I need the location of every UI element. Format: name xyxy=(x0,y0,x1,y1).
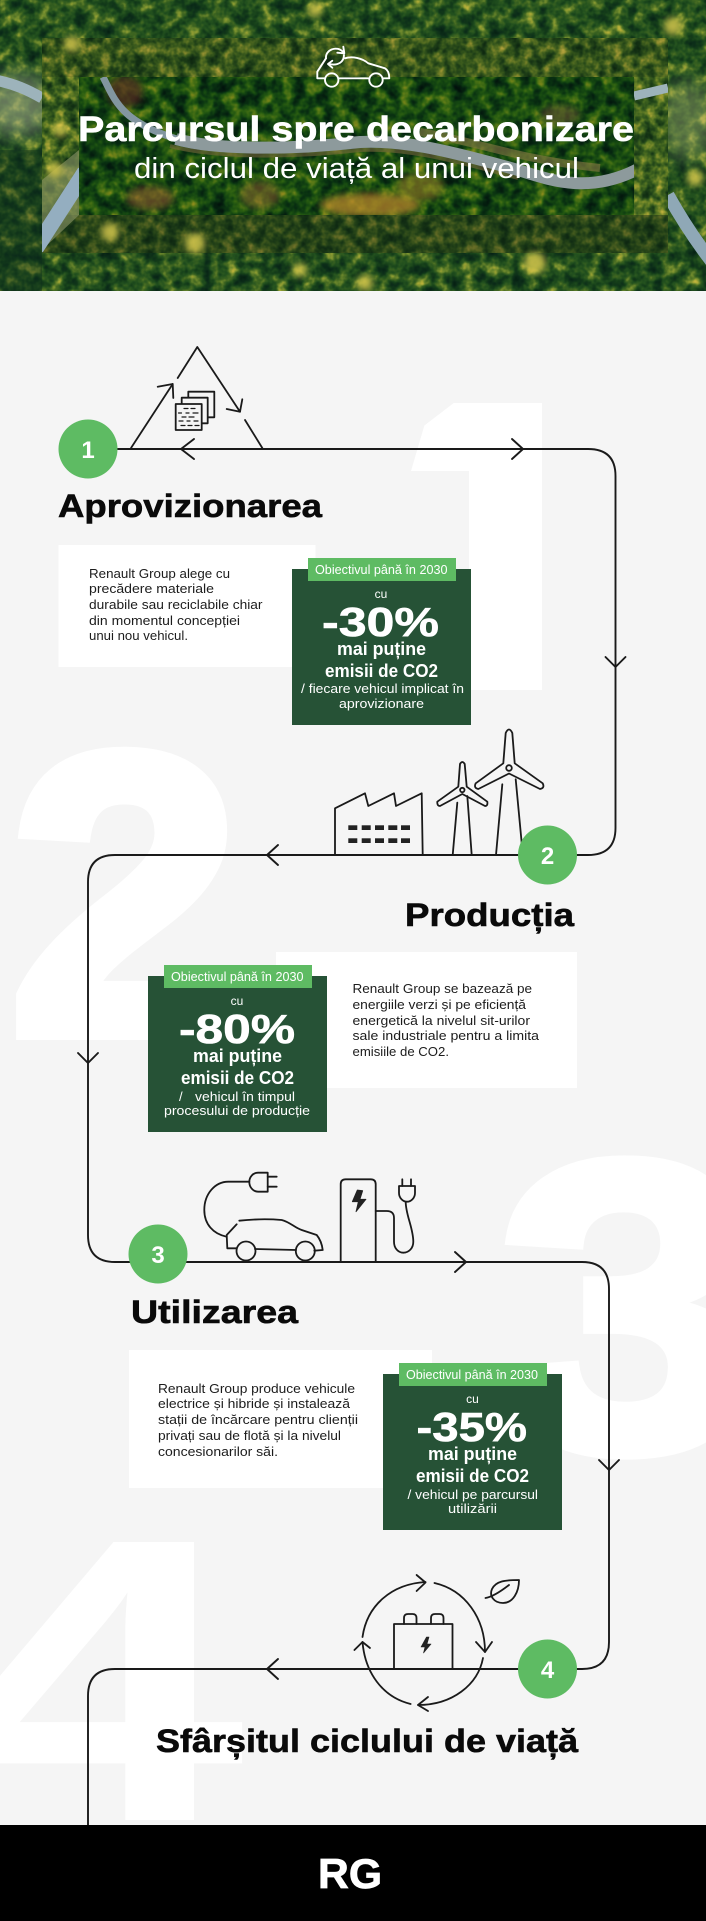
step 2 target card: emisii de CO2 xyxy=(181,1068,294,1088)
step 4 badge xyxy=(518,1640,577,1698)
step 2 description panel: Renault Group se bazează pe xyxy=(352,981,532,996)
step 4 badge: 4 xyxy=(541,1657,555,1684)
step 1 badge: 1 xyxy=(81,437,95,464)
step 3 target card: utilizării xyxy=(448,1501,497,1516)
step 1 description panel: unui nou vehicul. xyxy=(89,628,188,643)
step 1 description panel xyxy=(58,545,316,667)
step 2 target card: vehicul în timpul xyxy=(195,1089,295,1104)
hero title: Parcursul spre decarbonizare xyxy=(78,110,634,149)
icon: small wind turbine xyxy=(437,762,487,855)
step 3 description panel: privați sau de flotă și la nivelul xyxy=(158,1428,341,1443)
step 1 target card: -30% xyxy=(322,599,439,645)
step 3 target card: cu xyxy=(466,1392,479,1406)
step 1 description panel: din momentul concepției xyxy=(89,613,240,628)
logo: RG: RG xyxy=(318,1850,382,1897)
icon: leaf xyxy=(486,1580,519,1603)
step 1 description panel: Renault Group alege cu xyxy=(89,566,230,581)
big number 1: 1 xyxy=(404,324,594,776)
step 2 description panel: emisiile de CO2. xyxy=(352,1044,449,1059)
step 3 description panel: electrice și hibride și instalează xyxy=(158,1396,351,1411)
arrows on journey line xyxy=(78,439,626,1679)
step 2 description panel: energiile verzi și pe eficiență xyxy=(352,997,527,1012)
step 1 target card: cu xyxy=(375,587,387,601)
step 3 description panel: concesionarilor săi. xyxy=(158,1444,278,1459)
step 2 description panel: energetică la nivelul sit-urilor xyxy=(352,1013,531,1028)
step 1 target card: mai puține xyxy=(337,639,426,659)
step 3 target card: -35% xyxy=(416,1404,527,1450)
icon: battery in recycling loop xyxy=(354,1575,492,1711)
step 2 badge xyxy=(518,826,577,884)
hero icon: car with recycling arrows xyxy=(317,47,389,87)
step 3 target card: emisii de CO2 xyxy=(416,1466,529,1486)
step 1 target card xyxy=(292,558,471,725)
step 3 badge xyxy=(128,1224,188,1284)
step 2 badge: 2 xyxy=(541,843,554,870)
step 1 badge xyxy=(58,420,118,478)
step 3 description panel xyxy=(129,1350,432,1488)
step 1 target card: / fiecare vehicul implicat în xyxy=(301,681,464,696)
side road left xyxy=(0,80,42,98)
icon: large wind turbine xyxy=(475,730,543,855)
hero subtitle: din ciclul de viață al unui vehicul xyxy=(134,153,579,185)
step 3 target card xyxy=(383,1363,562,1530)
step 3 description panel: stații de încărcare pentru clienții xyxy=(158,1412,358,1427)
step 1 description panel: durabile sau reciclabile chiar xyxy=(89,597,263,612)
step 2 heading: Producția xyxy=(405,897,574,933)
step 3 target card: / vehicul pe parcursul xyxy=(408,1487,538,1502)
step 2 target card: Obiectivul până în 2030 xyxy=(171,970,304,984)
hero: aerial forest with road xyxy=(0,0,706,291)
step 1 description panel: precădere materiale xyxy=(89,581,214,596)
step 1 target card: emisii de CO2 xyxy=(325,661,438,681)
icon: charging station xyxy=(341,1179,415,1262)
icon: electric car with cable xyxy=(204,1173,323,1260)
journey line xyxy=(88,449,616,1825)
step 2 target card xyxy=(148,965,327,1132)
step 2 target card: mai puține xyxy=(193,1046,282,1066)
step 2 description panel xyxy=(276,952,577,1088)
step 3 description panel: Renault Group produce vehicule xyxy=(158,1381,355,1396)
step 2 target card: cu xyxy=(231,994,243,1008)
step 3 heading: Utilizarea xyxy=(131,1294,298,1330)
step 2 description panel: sale industriale pentru a limita xyxy=(352,1028,540,1043)
inner panel xyxy=(79,77,634,215)
step 2 target card: -80% xyxy=(179,1006,295,1052)
big number 2: 2 xyxy=(9,671,241,1118)
step 1 heading: Aprovizionarea xyxy=(58,488,322,524)
outer panel xyxy=(42,38,668,253)
step 2 target card: / xyxy=(179,1089,183,1104)
step 3 badge: 3 xyxy=(151,1242,165,1269)
step 2 target card: procesului de producție xyxy=(164,1103,310,1118)
side road right xyxy=(668,195,706,262)
footer bar xyxy=(0,1825,706,1921)
step 1 target card: Obiectivul până în 2030 xyxy=(315,563,448,577)
icon: recycling triangle with material sheets xyxy=(131,347,262,448)
icon: factory xyxy=(335,793,423,855)
step 3 target card: Obiectivul până în 2030 xyxy=(406,1368,538,1382)
yellow tree crowns xyxy=(47,3,703,291)
step 4 heading: Sfârșitul ciclului de viață xyxy=(156,1723,578,1759)
step 3 target card: mai puține xyxy=(428,1444,517,1464)
step 1 target card: aprovizionare xyxy=(339,696,424,711)
